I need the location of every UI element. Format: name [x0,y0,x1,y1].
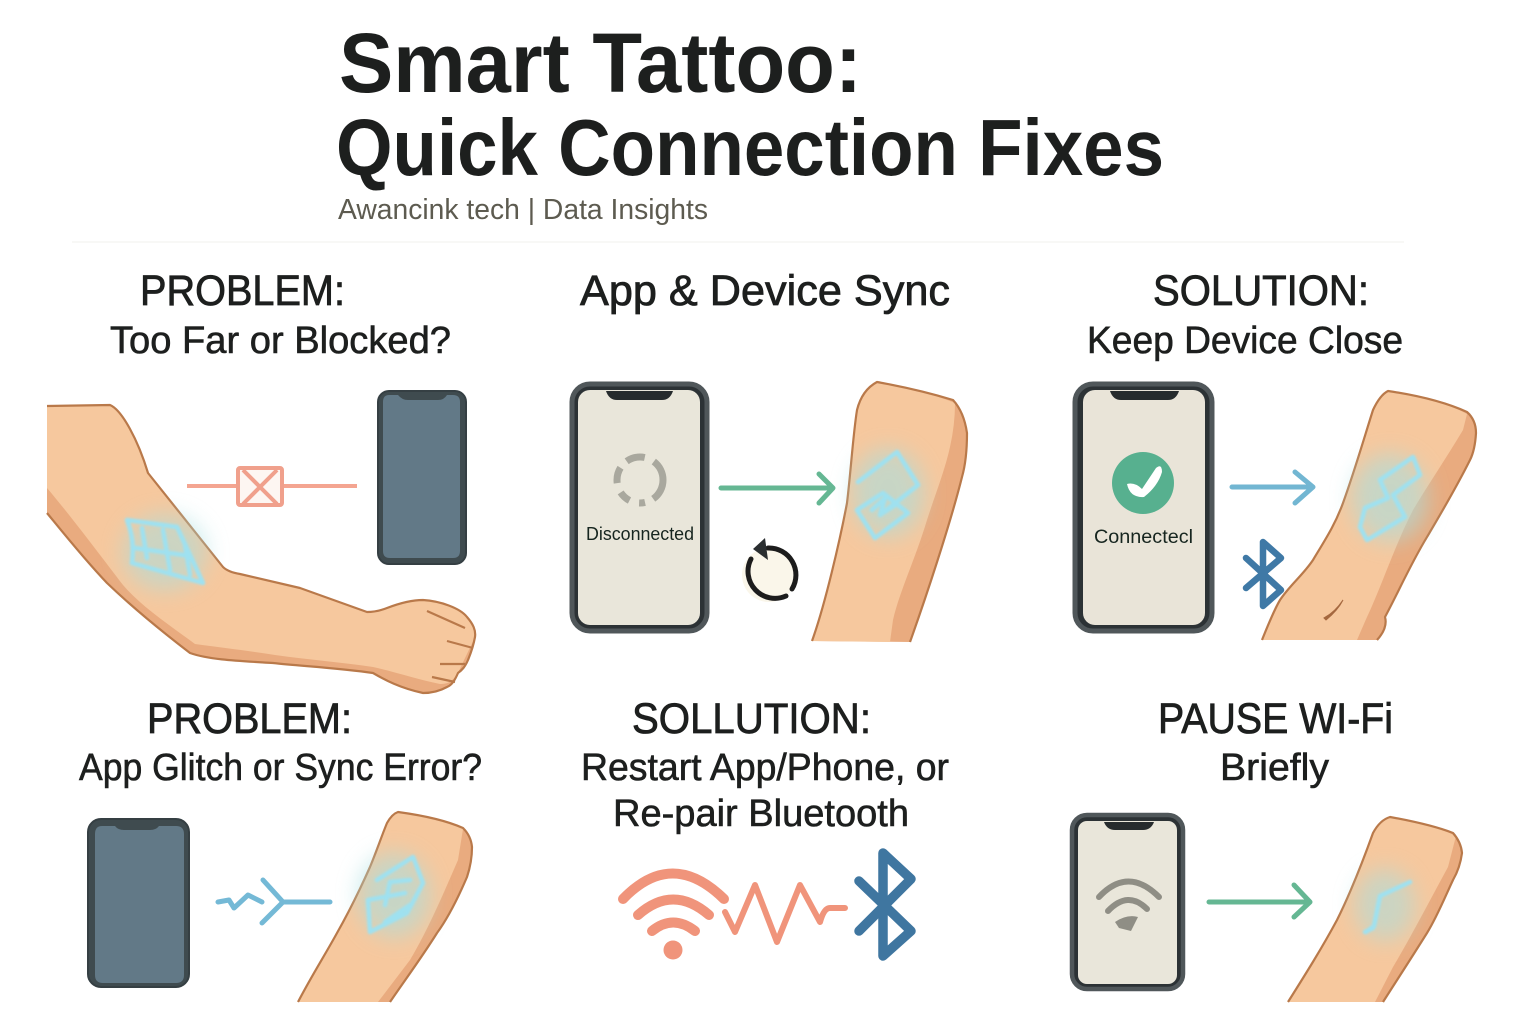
panel: keep device close [1075,267,1476,640]
icon: wifi [623,874,724,960]
heading: app glitch: PROBLEM: [147,695,352,743]
icon: blocked signal [187,468,357,505]
icon: wave signal [725,885,845,942]
heading: restart or re-pair: SOLLUTION: [632,695,871,743]
heading: keep device close: SOLUTION: [1153,267,1369,315]
illustration: outstretched arm with tattoo [47,405,475,693]
illustration: bent forearm with tattoo [1262,391,1476,640]
illustration: forearm with tattoo [812,382,967,642]
icon: phone, screen off [88,819,189,987]
arrow: device to tattoo [1232,472,1313,503]
heading: keep device close [1087,267,1403,362]
panel: app and device sync [572,267,967,642]
heading: too far [110,267,451,362]
arrow: phone to tattoo [1209,885,1310,917]
illustration: forearm with tattoo [298,812,472,1002]
heading: restart or re-pair [581,695,949,835]
heading: pause wi-fi: Briefly [1220,747,1329,789]
heading: pause wi-fi: PAUSE WI-Fi [1158,695,1393,743]
panel: pause wi-fi [1072,695,1462,1002]
title: Smart Tattoo: [339,16,862,110]
icon: refresh [742,538,796,602]
arrow: phone to tattoo [721,474,833,503]
icon: broken signal [218,880,330,923]
icon: bluetooth [859,853,911,956]
heading: too far: Too Far or Blocked? [110,320,451,362]
heading: keep device close: Keep Device Close [1087,320,1403,362]
heading: restart or re-pair: Restart App/Phone, or [581,747,949,789]
heading: app glitch [79,695,482,789]
icon: phone, screen off [378,391,466,564]
heading: restart or re-pair: Re-pair Bluetooth [613,793,909,835]
heading: app and device sync: App & Device Sync [580,267,950,315]
heading: app glitch: App Glitch or Sync Error? [79,747,482,789]
heading: too far: PROBLEM: [140,267,345,315]
panel: app glitch or sync error [79,695,482,1002]
panel: too far or blocked [47,267,475,693]
icon: phone disconnected [572,384,707,631]
icon: bluetooth [1246,542,1281,606]
icon: phone with wifi [1072,815,1183,989]
label: connected: Connectecl [1094,527,1193,548]
illustration: forearm with tattoo [1288,817,1462,1002]
heading: pause wi-fi [1158,695,1393,789]
title: Quick Connection Fixes [336,103,1164,192]
label: disconnected: Disconnected [586,524,694,544]
panel: restart or re-pair [581,695,949,960]
title [336,16,1164,192]
icon: phone connected [1075,384,1212,631]
subtitle: Awancink tech | Data Insights [338,194,708,226]
